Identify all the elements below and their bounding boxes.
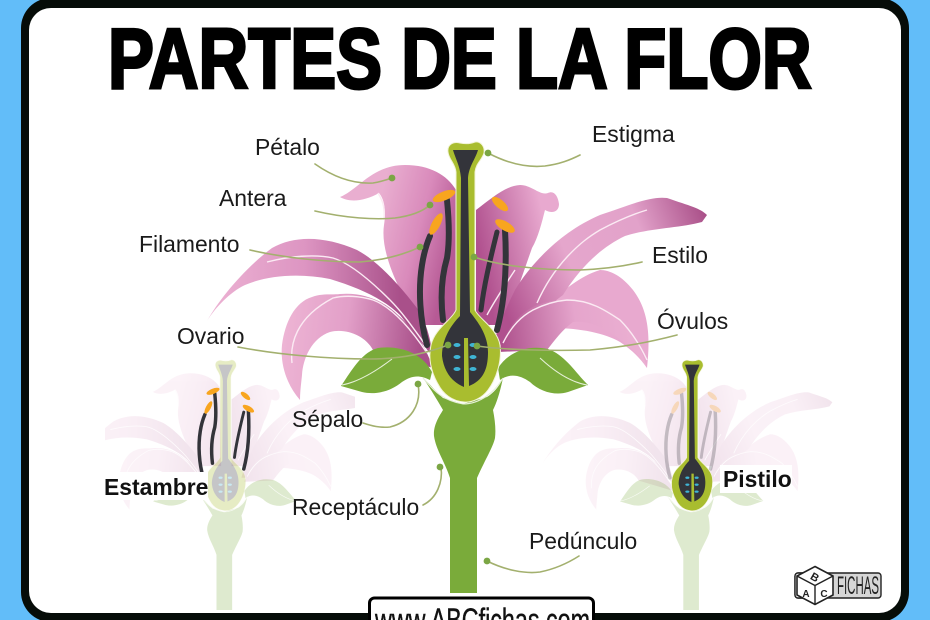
- pistil outer: [430, 142, 500, 402]
- leader: estigma: [488, 153, 580, 166]
- anthers: [427, 187, 517, 237]
- back right petal: [476, 185, 559, 325]
- label: Pedunculo: Pedúnculo: [529, 528, 637, 554]
- leader: ovulos: [477, 335, 677, 350]
- logo: ABC fichas: [795, 566, 881, 604]
- pistil: [430, 142, 500, 402]
- leader: receptaculo: [423, 467, 441, 505]
- label: Estambre: Estambre: [104, 474, 208, 500]
- left sepal: [341, 347, 432, 393]
- leader lines with dots: [238, 153, 677, 573]
- right sepal: [498, 348, 588, 394]
- label: Filamento: Filamento: [139, 231, 240, 257]
- right rear petal: [530, 270, 649, 368]
- title: PARTES DE LA FLOR: [108, 12, 812, 107]
- right lower petal: [498, 300, 647, 368]
- text: FICHAS: [837, 572, 879, 600]
- logo: ABC fichas: C: [820, 589, 828, 600]
- label: Ovulos: Óvulos: [657, 308, 728, 334]
- stamens: [420, 187, 517, 345]
- label: Petalo: Pétalo: [255, 134, 320, 160]
- logo: ABC fichas: B: [808, 571, 821, 585]
- petals: [207, 165, 707, 400]
- logo: ABC fichas: A: [802, 589, 810, 600]
- ovules: [454, 343, 476, 371]
- label: Antera: Antera: [219, 185, 287, 211]
- receptacle and peduncle: [423, 378, 503, 593]
- left lower petal: [282, 294, 433, 400]
- label: Ovario: Ovario: [177, 323, 244, 349]
- right big petal: [493, 198, 707, 345]
- leader: filamento: [250, 247, 420, 262]
- pistil inner dark: [442, 150, 488, 387]
- leader: pedunculo: [487, 556, 579, 573]
- leader: sepalo: [363, 384, 419, 427]
- right faded flower: pistilo: [542, 360, 832, 620]
- back left petal: [340, 165, 458, 325]
- label: Estilo: Estilo: [652, 242, 708, 268]
- leader: estilo: [474, 257, 642, 270]
- left faded flower: estambre: [105, 360, 355, 610]
- label: Sepalo: Sépalo: [292, 406, 363, 432]
- leader: petalo: [315, 164, 392, 183]
- label: Estigma: Estigma: [592, 121, 675, 147]
- label: Receptaculo: Receptáculo: [292, 494, 419, 520]
- left big petal: [207, 239, 432, 356]
- main flower: [207, 142, 707, 593]
- labels: [139, 121, 728, 554]
- leader dots: [389, 150, 491, 564]
- label: Pistilo: Pistilo: [723, 466, 792, 492]
- sepal veins: [342, 358, 587, 404]
- sepals and receptacle: [341, 347, 588, 593]
- leader: antera: [315, 205, 430, 219]
- petal veins: [267, 193, 647, 363]
- website box: [370, 598, 594, 620]
- filaments: [420, 200, 506, 345]
- leader: ovario: [238, 345, 448, 359]
